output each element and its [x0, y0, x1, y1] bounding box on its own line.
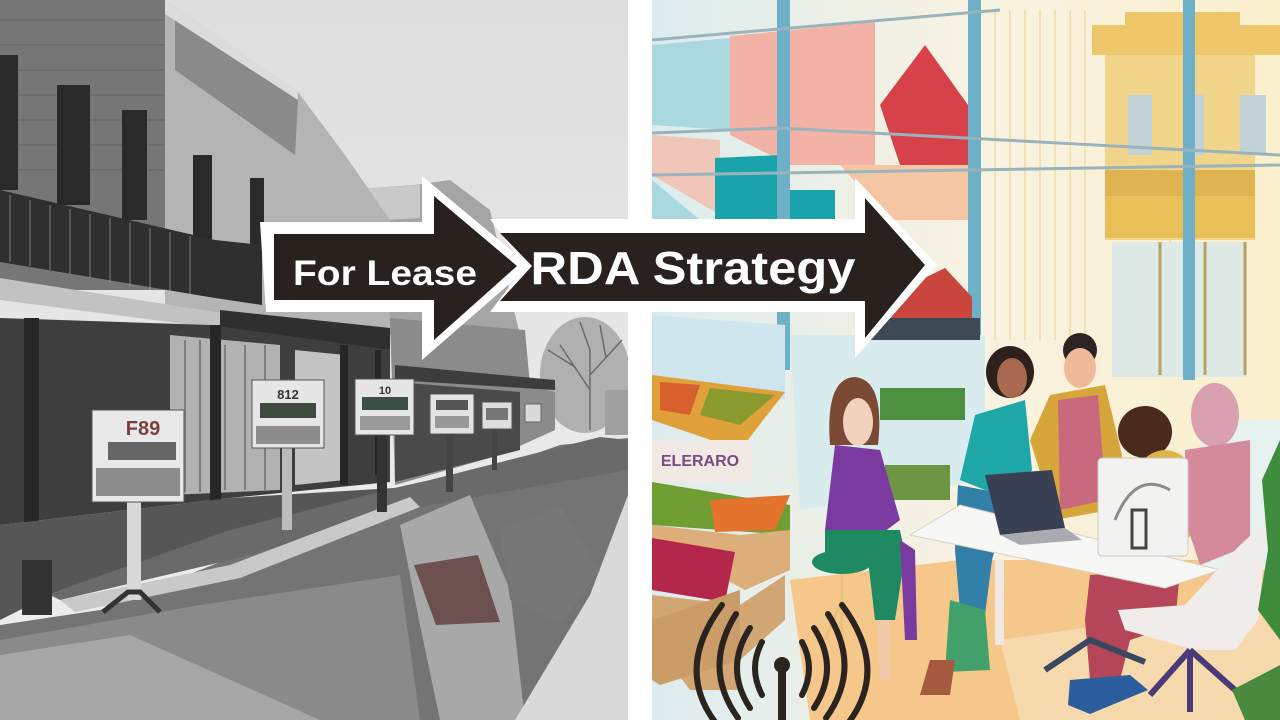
- herb planter behind team: [880, 388, 965, 420]
- dark storefront: [0, 318, 390, 525]
- person in translucent pink: [1185, 383, 1250, 565]
- white office chair: [1118, 520, 1268, 712]
- yellow historic building: [1092, 12, 1280, 377]
- for lease sign 4: [430, 394, 474, 492]
- window mullions: [777, 0, 1195, 380]
- person in purple: [812, 377, 917, 680]
- curtain stripes: [995, 10, 1170, 350]
- label: For Lease: For Lease: [293, 254, 477, 293]
- for lease sign 2: [252, 380, 324, 530]
- building mid light facade: [165, 0, 390, 340]
- arrow: RDA Strategy: [490, 178, 937, 358]
- colored reflections in the glass: [652, 38, 730, 130]
- panel: revitalized street in colour: [652, 0, 1280, 720]
- for lease sign 2: 812: [277, 387, 299, 402]
- person in teal: [920, 346, 1034, 695]
- for lease sign 3: [355, 379, 414, 512]
- team around the table: [812, 333, 1280, 720]
- for lease sign 6: [525, 404, 541, 422]
- floor: [790, 560, 1280, 720]
- manhole patch: [414, 555, 500, 625]
- desktop monitor: [1098, 458, 1188, 556]
- lower sidewalk wall: [0, 488, 395, 620]
- produce market stand: [652, 375, 790, 690]
- arrow: For Lease: [260, 176, 530, 360]
- person in pink vest: [1030, 333, 1122, 520]
- panel: vacant street in black and white: [0, 0, 630, 720]
- lower window area: [652, 315, 785, 400]
- brick building: [0, 0, 165, 290]
- sidewalk: [40, 437, 628, 600]
- for lease sign 1: F89: [126, 418, 160, 440]
- road surface: [0, 438, 628, 720]
- white divider between panels: [628, 0, 652, 720]
- for lease sign 5: [482, 402, 512, 470]
- road light patches: [400, 495, 525, 720]
- market stall canopy: [890, 268, 972, 325]
- white meeting table: [910, 505, 1220, 670]
- plant: [1232, 440, 1280, 720]
- for lease sign 1: [92, 410, 184, 612]
- distant buildings: [345, 180, 520, 335]
- awning: [0, 278, 262, 335]
- balcony: [0, 190, 262, 305]
- windows: [0, 55, 264, 248]
- for lease sign 3: 10: [379, 385, 391, 397]
- seated person at right: [1068, 406, 1201, 714]
- laptop: [985, 470, 1082, 545]
- pillars: [24, 318, 381, 558]
- bare trees: [540, 317, 630, 433]
- produce market stand: ELERARO: [661, 453, 739, 470]
- icon: wifi broadcast signal: [697, 605, 867, 720]
- label: RDA Strategy: RDA Strategy: [530, 242, 856, 294]
